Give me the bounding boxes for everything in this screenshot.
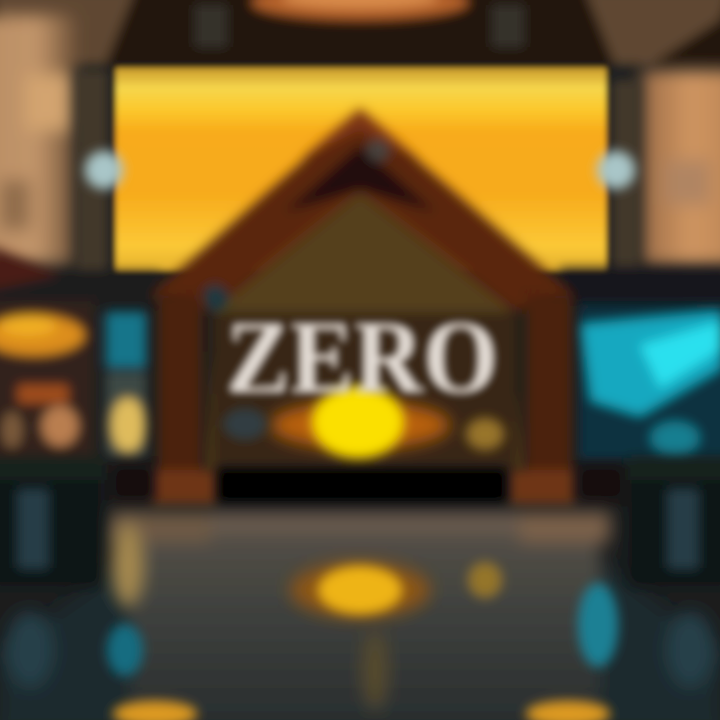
house gable <box>150 108 575 504</box>
floor <box>0 512 720 720</box>
gable posts <box>152 295 574 504</box>
title: ZERO: ZERO <box>226 300 498 415</box>
ceiling <box>0 0 720 65</box>
planters left and right <box>0 458 720 586</box>
left shop panels <box>0 300 146 465</box>
yellow backdrop panel <box>116 68 606 270</box>
gable roof <box>150 108 575 312</box>
gable interior <box>205 180 525 470</box>
floor reflections <box>6 523 714 720</box>
side walls <box>0 15 720 265</box>
dark counter <box>112 465 624 504</box>
column orbs <box>85 151 635 189</box>
sign glow: yellow sun <box>223 386 504 458</box>
mid band <box>0 245 720 304</box>
right cyan panel <box>578 305 720 460</box>
columns <box>76 70 640 275</box>
